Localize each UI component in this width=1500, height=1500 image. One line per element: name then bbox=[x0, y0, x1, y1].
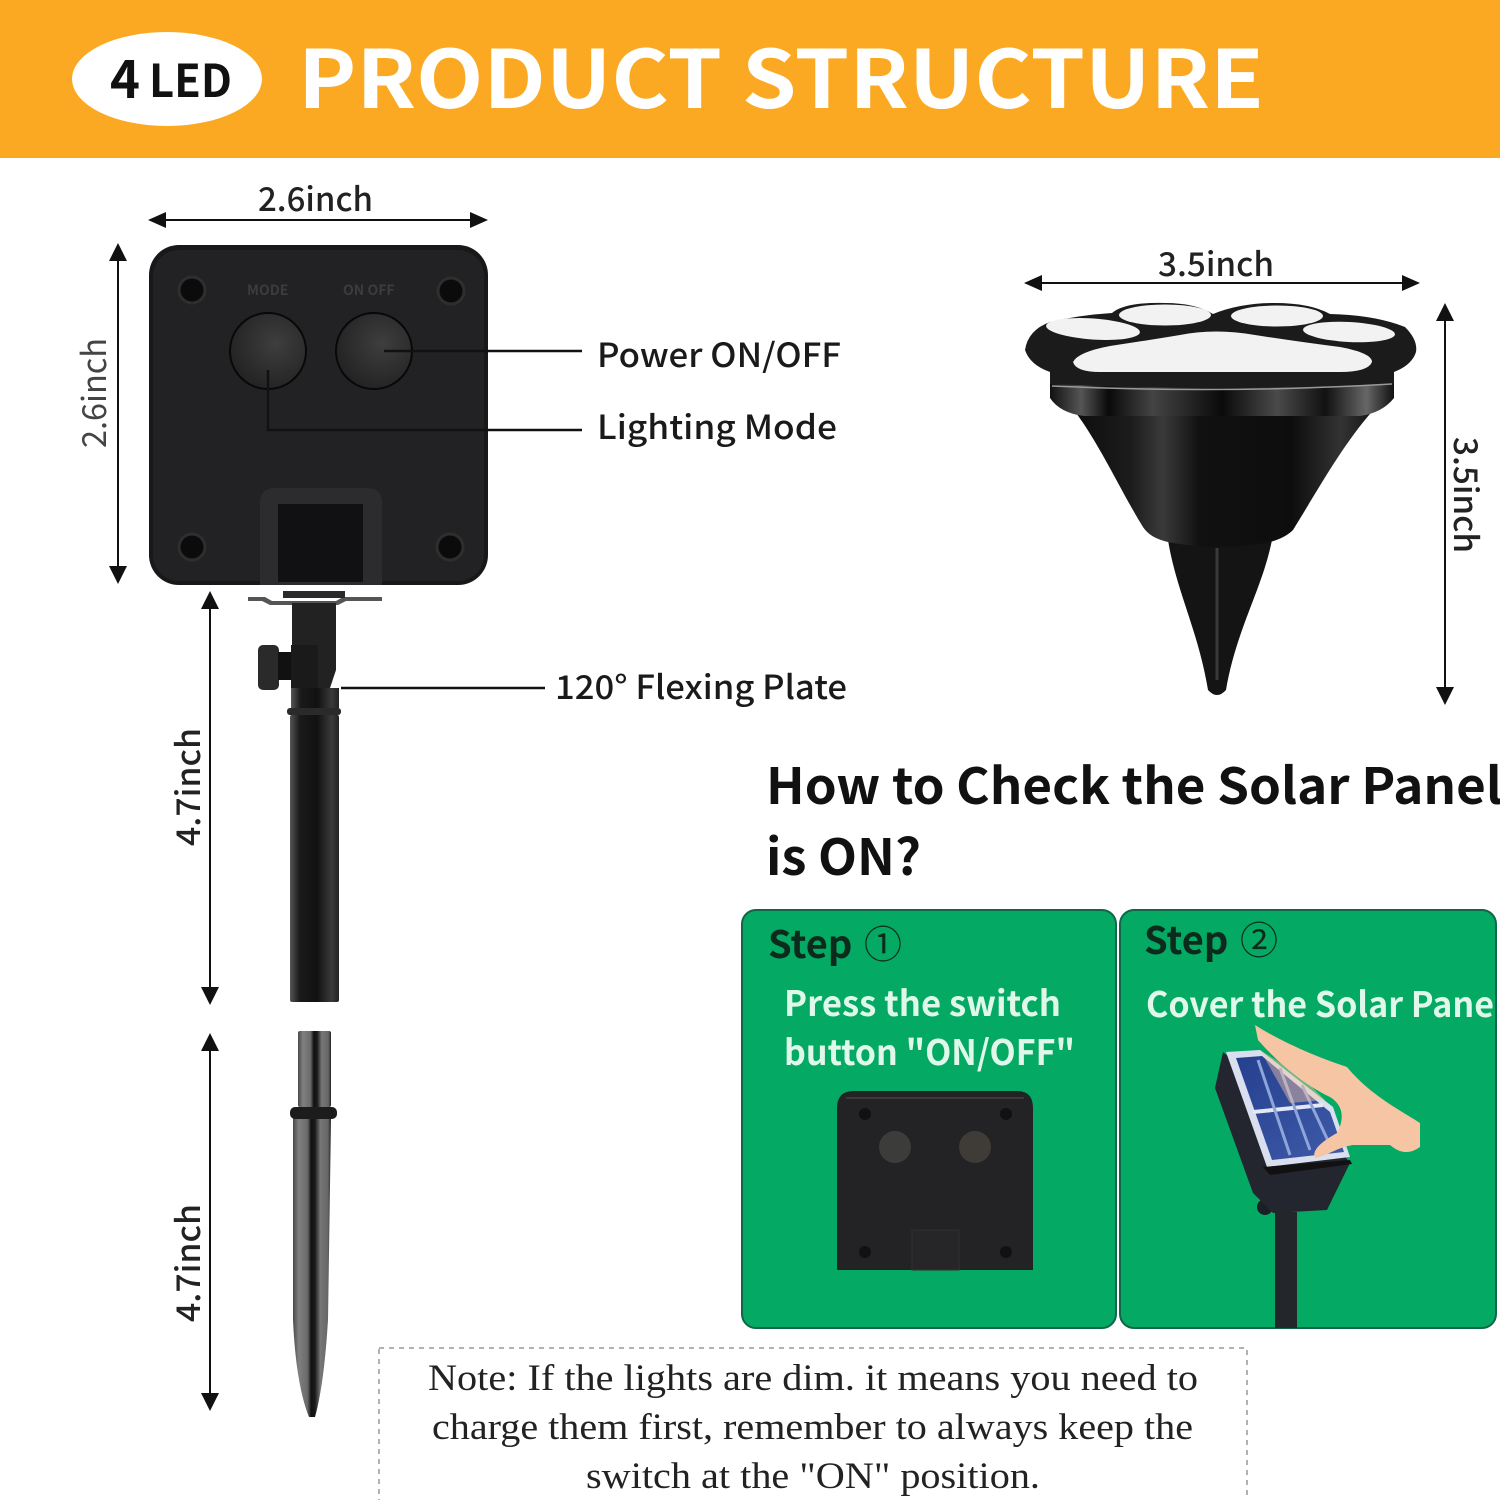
power button bbox=[336, 313, 412, 389]
step 1 label: Step ① bbox=[768, 914, 902, 969]
dimension: lower spike: 4.7inch bbox=[162, 1204, 210, 1322]
panel: step 2 bbox=[1120, 910, 1496, 1328]
box button labels: ON OFF bbox=[343, 280, 395, 300]
callout: flexing plate: 120° Flexing Plate bbox=[555, 661, 847, 709]
screws bbox=[179, 277, 464, 560]
solar control box bbox=[149, 245, 488, 585]
badge: 4 LED: 4 bbox=[110, 38, 140, 114]
step 1 instruction: Press the switch bbox=[784, 976, 1061, 1027]
paw print solar light bbox=[1025, 303, 1416, 695]
box button labels bbox=[247, 280, 395, 300]
dimension: paw light width: 3.5inch bbox=[1158, 238, 1274, 286]
callout: power on/off: Power ON/OFF bbox=[597, 329, 841, 377]
step 2 instruction: Cover the Solar Pane bbox=[1146, 977, 1494, 1028]
spike bbox=[1168, 540, 1272, 695]
heading: how to check: is ON? bbox=[766, 818, 921, 890]
dimension: control box height bbox=[68, 243, 127, 584]
step 1 instruction bbox=[784, 976, 1075, 1076]
rim highlight bbox=[1052, 384, 1392, 390]
callout: lighting mode bbox=[268, 370, 837, 449]
box button labels: MODE bbox=[247, 280, 288, 300]
header banner bbox=[0, 0, 1500, 158]
step 1 instruction: button "ON/OFF" bbox=[784, 1025, 1075, 1076]
note box: Note: If the lights are dim. it means you need to bbox=[428, 1358, 1198, 1399]
badge: 4 LED bbox=[72, 32, 262, 126]
band bbox=[1050, 382, 1394, 416]
heading: how to check: How to Check the Solar Panel bbox=[766, 747, 1500, 819]
hand covering panel bbox=[1255, 1025, 1420, 1158]
step 2 label: Step ② bbox=[1144, 910, 1278, 965]
lower ground spike bbox=[290, 1031, 337, 1417]
note box: switch at the "ON" position. bbox=[586, 1456, 1040, 1497]
title: PRODUCT STRUCTURE bbox=[298, 16, 1264, 132]
panel: step 1 bbox=[742, 910, 1116, 1328]
dimension: control box width bbox=[148, 173, 488, 228]
dimension: control box height: 2.6inch bbox=[68, 338, 116, 448]
stake socket bbox=[260, 488, 382, 585]
dimension: upper stake: 4.7inch bbox=[162, 728, 210, 846]
upper stake with flexing plate bbox=[248, 591, 382, 1002]
note box: charge them first, remember to always keep the bbox=[432, 1407, 1193, 1448]
dimension: upper stake bbox=[162, 591, 219, 1005]
toe pads and main pad bbox=[1045, 304, 1395, 372]
dimension: paw light height: 3.5inch bbox=[1444, 437, 1492, 553]
paw top bbox=[1025, 303, 1416, 388]
callout: lighting mode: Lighting Mode bbox=[597, 401, 837, 449]
note box bbox=[379, 1348, 1247, 1500]
solar lamp on stake bbox=[1215, 1050, 1352, 1328]
mode button bbox=[230, 313, 306, 389]
dimension: paw light height bbox=[1436, 303, 1492, 705]
cone body bbox=[1070, 405, 1378, 547]
dimension: lower spike bbox=[162, 1033, 219, 1411]
heading: how to check bbox=[766, 747, 1500, 890]
dimension: paw light width bbox=[1024, 238, 1420, 291]
dimension: control box width: 2.6inch bbox=[258, 173, 373, 221]
mini control box bbox=[837, 1091, 1033, 1270]
badge: 4 LED: LED bbox=[149, 45, 232, 110]
